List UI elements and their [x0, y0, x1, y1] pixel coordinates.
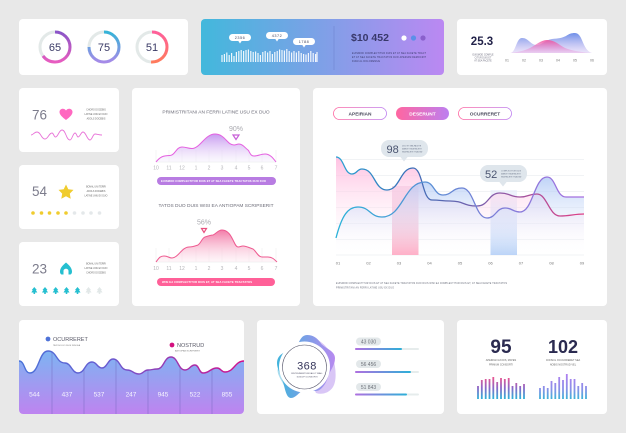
- area values: 537: [94, 392, 105, 398]
- tab OCURRERET: OCURRERET: [470, 112, 500, 118]
- x axis labels: 07: [519, 260, 524, 266]
- value 95: 95: [490, 337, 512, 358]
- footnote: EUISMOD COMPLECTITUR DUIS ET AT SEA FACETE TRACTATOS DUO DUIS WISI EA COMPLECTITUR DUIS ET, AT SEA FACETE TRACTATOS: [336, 282, 507, 285]
- callout 98: [381, 140, 428, 162]
- axis labels 2: [153, 266, 278, 272]
- donut gauge 51: 51: [146, 42, 158, 54]
- icon: house drop: [60, 262, 72, 274]
- banner text: ET AT SEA FACETE TRACTATOS DUO APERIAM DEMOCRIT: [352, 56, 427, 59]
- axis labels 1: 4: [235, 166, 238, 172]
- caption: CHORO DOCEBIS: [86, 110, 106, 112]
- caption: LATINE UNU EX DUO: [85, 267, 108, 270]
- axis labels 1: 12: [179, 166, 185, 172]
- value 25.3: 25.3: [471, 36, 493, 48]
- panel: area summary: [457, 19, 607, 75]
- icon: heart: [60, 109, 72, 120]
- bubble 2356: [229, 34, 251, 44]
- banner text: DIAM AL DOLOREMUE: [352, 60, 380, 63]
- progress 51 843: [355, 383, 419, 396]
- axis labels 2: 2: [208, 266, 211, 272]
- axis labels 2: 7: [275, 266, 278, 272]
- value 90%: 90%: [229, 126, 243, 133]
- caption: BONAL UNI TERRI: [86, 262, 106, 266]
- axis labels 1: 1: [195, 166, 198, 172]
- caption: BONAL UNI TERRI: [86, 186, 106, 188]
- progress 56 456: [355, 360, 419, 373]
- area values: 855: [222, 392, 233, 398]
- pill caption purple: EUISMOD COMPLECTITUR DUIS ET AT SEA FACETE TRACTATOS DUO DUO: [161, 179, 266, 183]
- callout 52: [480, 165, 527, 186]
- legend OCURRERET: [46, 337, 88, 347]
- card: home metric: [19, 242, 119, 306]
- overlapping area chart: [510, 33, 592, 53]
- bubble 1788: 1788: [299, 40, 309, 44]
- x axis labels: 09: [580, 260, 585, 266]
- x axis labels: 01: [336, 260, 341, 266]
- callout 52: MAIN ET SEA FACETE: [501, 172, 521, 176]
- axis labels: 05: [573, 58, 577, 62]
- blob caption: [291, 372, 324, 378]
- panel: donut gauges: [19, 19, 188, 75]
- axis labels 1: 2: [208, 166, 211, 172]
- x axis labels: 02: [366, 260, 371, 266]
- axis labels 2: 1: [195, 266, 198, 272]
- caption: [85, 186, 108, 198]
- tab APEIRIAN: APEIRIAN: [349, 112, 372, 118]
- marker triangle: [202, 228, 206, 232]
- rating dots: [31, 211, 101, 215]
- area values: 522: [190, 392, 201, 398]
- caption left: PRIMUM CONSORTI: [489, 364, 513, 366]
- area values: 437: [62, 392, 73, 398]
- axis labels: 03: [539, 58, 543, 62]
- area fill 2: [336, 177, 584, 255]
- main chart: [336, 157, 584, 255]
- card: star metric: [19, 165, 119, 229]
- panel: gradient banner: [201, 19, 444, 75]
- panel: two stats with bars: [457, 320, 607, 414]
- axis labels 1: 7: [275, 166, 278, 172]
- banner text: [352, 52, 427, 63]
- area with line: [19, 351, 244, 414]
- legend NOSTRUD: NOSTRUD: [177, 343, 204, 349]
- bars right: [540, 374, 586, 399]
- bubble 2356: 2356: [235, 36, 245, 40]
- callout 98: DUO ET SEA FACETE: [402, 144, 422, 148]
- donut gauge 51: [137, 32, 167, 62]
- donut gauge 75: 75: [98, 42, 110, 54]
- pill caption pink: WISI EA COMPLECTITUR DUIS ET, AT SEA FACETE TRACTATOS: [162, 280, 252, 284]
- banner text: EUISMOD COMPLECTITUR DUIS ET AT SEA FACETE TRACT: [352, 52, 427, 55]
- donut gauge 65: 65: [49, 42, 61, 54]
- area values: 945: [158, 392, 169, 398]
- panel: wide area chart: [19, 320, 244, 414]
- caption: AT SEA FACETE: [474, 60, 492, 62]
- blob caption: INSTRUMENTUM FALLIT MALL: [291, 372, 324, 375]
- axis labels 1: 5: [248, 166, 251, 172]
- area values: 247: [126, 392, 137, 398]
- area values: 544: [29, 392, 40, 398]
- caption: [85, 110, 108, 120]
- axis labels: 04: [556, 58, 560, 62]
- tab DESERUNT: DESERUNT: [409, 112, 436, 118]
- banner amount: $10 452: [351, 32, 389, 44]
- axis labels 1: 11: [166, 166, 172, 172]
- panel: blob stat with progress bars: [257, 320, 444, 414]
- caption: EUISMOD COMPLE: [472, 54, 494, 56]
- banner dots: [401, 35, 426, 41]
- chart: pink area: [156, 230, 277, 262]
- bars left: [478, 377, 524, 399]
- callout 98: MAIN ET SEA FACETE: [402, 148, 422, 150]
- panel: main line chart: [313, 88, 607, 306]
- axis labels: 02: [522, 58, 526, 62]
- callout 52: 52: [485, 169, 497, 181]
- donut gauge 65: [40, 32, 70, 62]
- chart title 1: PRIMISTRITANI AN FERRI LATINE USU EX DUO: [162, 110, 270, 116]
- footnote: PRIMISTRITANI AN FERRI LATINE USU EX DUO: [336, 286, 394, 290]
- pill caption pink: [157, 278, 275, 286]
- callout 98: SEA FACETE TRACTAT: [402, 150, 423, 154]
- axis labels 2: 4: [235, 266, 238, 272]
- pulse wave: [31, 130, 102, 140]
- progress 43 030: [355, 338, 419, 350]
- area fill 1: [336, 157, 584, 255]
- x axis labels: 03: [397, 260, 402, 266]
- x axis labels: [336, 260, 585, 266]
- axis labels 2: 5: [248, 266, 251, 272]
- axis labels 2: 10: [153, 266, 159, 272]
- x axis labels: 08: [549, 260, 554, 266]
- callout 98: 98: [386, 144, 399, 156]
- x axis labels: 04: [427, 260, 432, 266]
- axis labels 1: 10: [153, 166, 159, 172]
- tab OCURRERET: [458, 108, 512, 120]
- progress 51 843: 51 843: [361, 385, 376, 391]
- donut gauge 75: [89, 32, 119, 62]
- caption left: [486, 359, 517, 366]
- callout 52: SEA FACETE TRACTAT: [501, 176, 522, 178]
- chart: purple area: [156, 134, 276, 162]
- axis labels 1: [153, 166, 278, 172]
- caption right: CONSUL OCCURRERET SEA: [546, 359, 580, 362]
- value 368: 368: [297, 360, 317, 372]
- bubble 4372: 4372: [272, 34, 282, 38]
- axis labels 2: 6: [261, 266, 264, 272]
- pill caption purple: [157, 177, 276, 185]
- axis labels: 06: [590, 58, 594, 62]
- legend OCURRERET: TATOS DUO DUIS WISI EA: [53, 344, 81, 347]
- banner bar chart: [222, 49, 317, 62]
- progress 56 456: 56 456: [361, 362, 376, 368]
- axis labels: [505, 58, 594, 62]
- bubble 4372: [266, 32, 288, 42]
- blob chart: [277, 335, 336, 398]
- legend OCURRERET: OCURRERET: [53, 337, 88, 343]
- caption: ADOLS DOCEBIS: [87, 118, 106, 120]
- caption right: [546, 359, 580, 366]
- axis labels 2: 12: [179, 266, 185, 272]
- caption: [85, 262, 108, 274]
- axis labels 2: 11: [166, 266, 172, 272]
- axis labels 1: 3: [221, 166, 224, 172]
- tree rating row: [31, 287, 102, 294]
- tab DESERUNT: [396, 107, 449, 120]
- tab APEIRIAN: [334, 108, 386, 120]
- marker triangle: [233, 135, 239, 140]
- caption: LATINE UNU EX DUO: [85, 194, 108, 198]
- footnote: [336, 282, 507, 290]
- caption right: NOBIS NOSTRUD VEL: [550, 364, 577, 366]
- value 54: 54: [32, 184, 48, 199]
- caption: ADOLS DOCEBIS: [87, 190, 106, 193]
- progress 43 030: 43 030: [361, 340, 376, 346]
- area values: [29, 392, 233, 398]
- axis labels 2: 3: [221, 266, 224, 272]
- caption: [472, 54, 494, 62]
- caption: LATINE UNU EX DUO: [85, 113, 108, 116]
- value 23: 23: [32, 262, 47, 276]
- axis labels: 01: [505, 58, 509, 62]
- highlight band pink: [392, 186, 418, 255]
- x axis labels: 05: [458, 260, 463, 266]
- highlight band blue: [490, 190, 517, 255]
- panel: two area charts: [132, 88, 300, 306]
- line series 1: [336, 157, 584, 216]
- caption: CITUR DUIS ET: [475, 58, 492, 60]
- icon: star: [59, 184, 74, 199]
- caption left: APEIRIAN AN DIS, MATES: [486, 359, 517, 362]
- axis labels 1: 6: [261, 166, 264, 172]
- x axis labels: 06: [488, 260, 493, 266]
- callout 52: COMPLECTITUR DUIS: [501, 170, 522, 172]
- value 56%: 56%: [197, 220, 211, 226]
- legend NOSTRUD: ANTIOPAM SCRIPSERIT: [175, 350, 201, 352]
- legend NOSTRUD: [170, 343, 204, 352]
- blob caption: SUSCIPI CONSORTI: [297, 376, 318, 378]
- bubble 1788: [293, 38, 315, 48]
- card: heart metric: [19, 88, 119, 152]
- line series 2: [336, 177, 584, 238]
- chart title 2: TATOS DUO DUIS WISI EA ANTIOPAM SCRIPSERIT: [158, 203, 274, 209]
- value 76: 76: [32, 108, 47, 122]
- value 102: 102: [548, 337, 578, 357]
- caption: CHORO DOCEBIS: [86, 272, 106, 274]
